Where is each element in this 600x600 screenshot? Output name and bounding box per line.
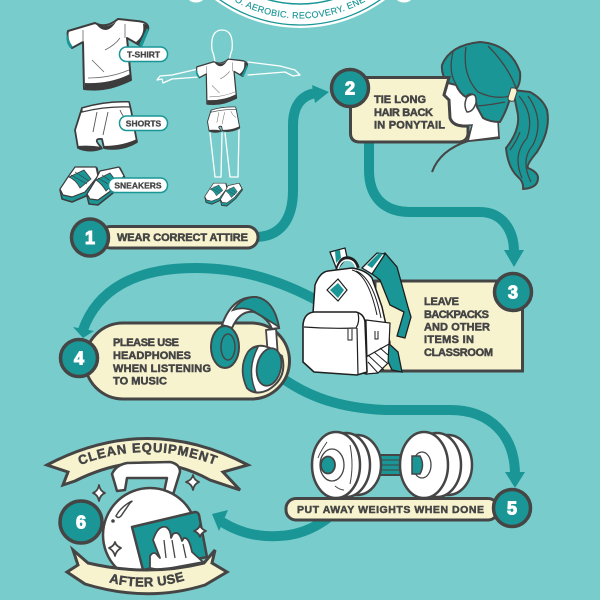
icon: sneakers [60, 167, 125, 205]
dumbbell [312, 432, 472, 498]
step 5 [286, 432, 530, 526]
icon: kettlebell [103, 462, 207, 582]
pill [100, 226, 258, 248]
text: LEAVE [424, 296, 459, 308]
pill [286, 498, 498, 520]
pill [85, 323, 290, 399]
text: ITEMS IN [424, 334, 474, 346]
icon: shorts [75, 102, 137, 152]
arrow: step 5 to step 6 [212, 510, 328, 536]
arrow: step 3 to step 4 [73, 268, 320, 338]
figure wearing attire [157, 30, 300, 206]
text: WHEN LISTENING [113, 363, 211, 375]
panel: clothing items [60, 19, 168, 205]
number circle [494, 490, 530, 526]
step 6 [43, 437, 252, 596]
number circle: 2 [345, 78, 355, 98]
banner: clean equipment: CLEAN EQUIPMENT [78, 442, 218, 464]
arrow: step 1 to step 2 [255, 85, 329, 237]
text: TO MUSIC [113, 376, 167, 388]
number circle [332, 70, 368, 106]
hair and head [432, 42, 548, 189]
label: sneakers: SNEAKERS [114, 180, 162, 190]
text: BACKPACKS [424, 309, 489, 321]
number circle: 6 [76, 512, 86, 532]
text box [375, 281, 522, 371]
number circle: 3 [508, 282, 518, 302]
text: HEADPHONES [113, 350, 191, 362]
text: PLEASE USE [113, 337, 179, 349]
text [113, 337, 211, 388]
label: shorts [120, 116, 168, 130]
number circle: 5 [507, 498, 517, 518]
icon: t-shirt [66, 19, 149, 91]
label: t-shirt: T-SHIRT [127, 49, 161, 59]
number circle: 1 [85, 228, 95, 248]
text: TIE LONG [374, 94, 426, 106]
label: sneakers [108, 178, 168, 192]
sparkles [93, 475, 206, 556]
step 3 [303, 248, 532, 375]
top badge [189, 0, 411, 28]
text [424, 296, 493, 359]
banner: after use: AFTER USE [108, 572, 184, 587]
text box [350, 78, 468, 142]
step 4 [60, 297, 290, 399]
number circle [494, 274, 532, 310]
step 2 [332, 42, 548, 189]
number circle: 4 [74, 348, 84, 368]
text: PUT AWAY WEIGHTS WHEN DONE [297, 504, 484, 516]
icon: headphones [211, 297, 285, 393]
banner: clean equipment [43, 437, 252, 492]
step 1 [72, 219, 258, 256]
label: t-shirt [120, 47, 168, 62]
text: IN PONYTAIL [374, 120, 445, 132]
text: AND OTHER [424, 322, 490, 334]
arrow: step 4 to step 5 [285, 380, 525, 488]
text: HAIR BACK [374, 107, 433, 119]
number circle [72, 219, 108, 256]
text: WEAR CORRECT ATTIRE [117, 232, 248, 244]
number circle [60, 501, 102, 543]
number circle [60, 340, 98, 376]
arrow: step 2 to step 3 [369, 140, 524, 267]
backpack [303, 248, 411, 375]
label: shorts: SHORTS [126, 118, 162, 128]
banner: after use [64, 545, 230, 596]
text [374, 94, 445, 132]
text: CLASSROOM [424, 347, 493, 359]
